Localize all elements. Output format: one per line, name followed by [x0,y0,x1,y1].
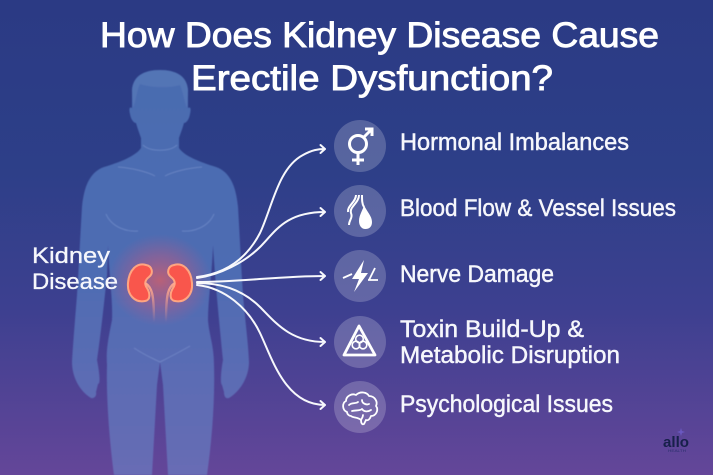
human body silhouette [72,70,249,475]
logo: allo [663,434,689,451]
arrows [197,145,325,409]
title: Erectile Dysfunction? [191,59,553,98]
label: Kidney Disease: Kidney [32,243,110,268]
label: Metabolic Disruption [400,342,620,369]
arrow to toxin build-up [197,283,325,346]
right kidney [168,264,192,301]
left kidney [128,264,152,301]
label: Kidney Disease [32,243,118,294]
chest and body contour lines [106,145,214,362]
item: toxin build-up [334,316,620,369]
arrow to nerve damage [197,272,325,282]
icon: lightning bolt [334,250,386,302]
label: Toxin Build-Up & [400,316,584,343]
title: How Does Kidney Disease Cause [100,16,659,55]
logo: HEALTH [668,448,686,453]
arrow to hormonal imbalances [197,145,325,277]
icon: vessel and blood drop [334,185,386,237]
arrow to blood flow [197,208,325,278]
item: blood flow and vessel issues [334,185,676,237]
item: nerve damage [334,250,554,302]
label: Kidney Disease: Disease [32,269,118,294]
title [100,16,659,98]
ureters [145,283,175,322]
icon: brain [334,381,386,433]
label: Nerve Damage [400,261,554,288]
item: psychological issues [334,381,613,433]
icon: warning triangle [334,316,386,368]
label [400,316,620,369]
label: Psychological Issues [400,391,613,418]
label: Blood Flow & Vessel Issues [400,195,676,222]
kidneys with glow [108,234,212,326]
icon: male female symbol [334,120,386,172]
label: Hormonal Imbalances [400,129,629,156]
logo [663,428,689,453]
arrow to psychological issues [197,285,325,409]
hair highlight [132,70,188,108]
item: hormonal imbalances [334,120,629,172]
